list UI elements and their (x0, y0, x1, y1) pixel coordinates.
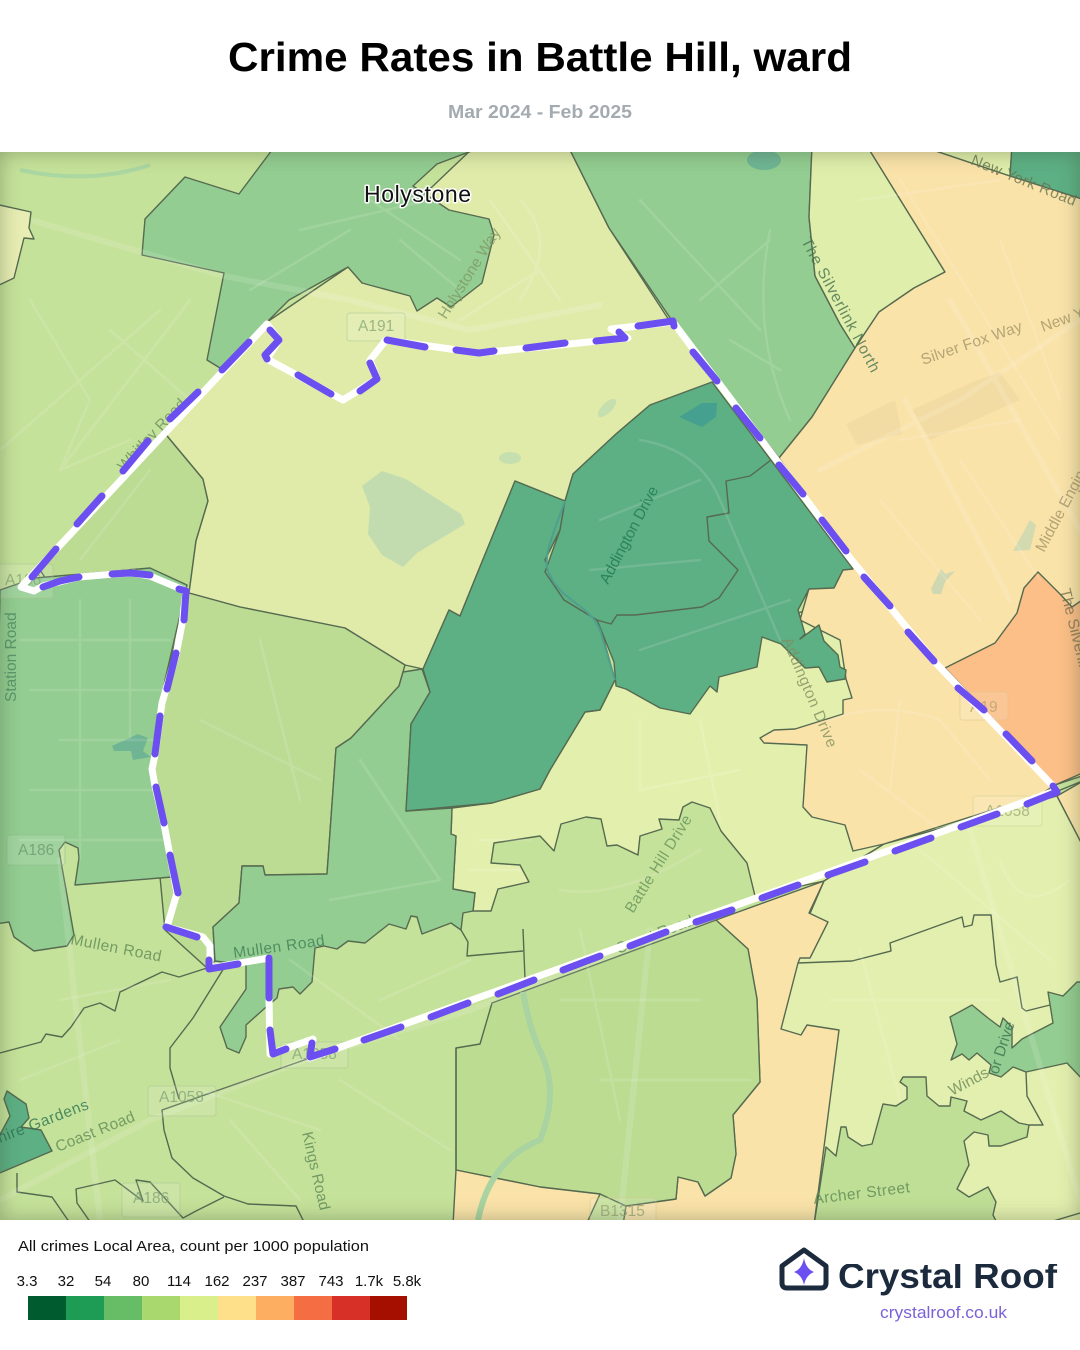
choropleth map (0, 152, 1080, 1220)
street network (0, 180, 1080, 1220)
road label: Whitley Road: Whitley Road (114, 396, 190, 475)
road label: Windsor Drive: Winds (946, 1064, 992, 1100)
road label: Holystone Way: Holystone Way (435, 225, 504, 322)
legend scale labels: 80 (133, 1273, 149, 1290)
map areas: choropleth polygons (0, 146, 1080, 1225)
icon: house with star (780, 1248, 828, 1290)
road label: Coast Road west: Coast Road (53, 1108, 137, 1156)
road badge: A186 centre-west (7, 835, 65, 865)
road labels (0, 152, 1080, 1228)
road label: Battle Hill Drive: Battle Hill Drive (622, 812, 696, 916)
legend scale labels: 114 (167, 1273, 191, 1290)
road badge: A186 south: A186 (133, 1190, 169, 1207)
place label: Holystone: Holystone (364, 181, 471, 207)
road badge: A19 (960, 692, 1008, 720)
water: ponds and river (20, 150, 1036, 1220)
legend scale labels (17, 1273, 422, 1290)
road badge: A186 west (0, 564, 53, 598)
road label: The Silverlink North: The Silverlink North (797, 235, 883, 375)
road label: Station Road: Station Road (3, 612, 20, 702)
legend scale labels: 162 (204, 1273, 230, 1290)
logo: Crystal Roof (780, 1248, 1058, 1322)
legend scale labels: 54 (95, 1273, 111, 1290)
legend colour bar (28, 1296, 407, 1320)
road label: Mullen Road west: Mullen Road (69, 931, 163, 965)
legend title: All crimes Local Area, count per 1000 population (18, 1238, 369, 1255)
ward boundary: dashed route (21, 321, 1057, 1058)
website link: crystalroof.co.uk (880, 1304, 1008, 1322)
legend scale labels: 3.3 (17, 1273, 37, 1290)
legend scale labels: 237 (242, 1273, 268, 1290)
road badge: A186 west: A186 (5, 572, 41, 589)
road badge: A1058 east: A1058 (985, 803, 1030, 820)
legend scale labels: 32 (58, 1273, 74, 1290)
road label: Silver Fox Way: Silver Fox Way (919, 318, 1025, 369)
road label: Archer Street: Archer Street (812, 1179, 911, 1208)
map edge shadow (0, 152, 1080, 1220)
road badge: A1058 south: A1058 (292, 1046, 337, 1063)
road label: Coast Road east: Coast Road (613, 912, 696, 958)
road badge: A1058 south-west: A1058 (159, 1089, 204, 1106)
legend (17, 1238, 422, 1320)
subtitle: date range: Mar 2024 - Feb 2025 (448, 102, 632, 122)
retail park shading (846, 400, 902, 445)
area boundary lines (0, 460, 1080, 1226)
legend scale labels: 743 (318, 1273, 344, 1290)
road label: Windsor Drive upper: or Drive (986, 1019, 1019, 1076)
road badge: B1315 (590, 1198, 656, 1228)
road badge: A191 (347, 313, 405, 341)
road label: Addington Drive north: Addington Drive (597, 484, 662, 587)
road badge: A191: A191 (358, 318, 394, 335)
road badge: A1058 east (973, 796, 1042, 826)
road label: New York Road: New York Road (969, 152, 1079, 210)
road badge: A1058 south-west (148, 1086, 216, 1116)
legend scale labels: 387 (280, 1273, 306, 1290)
road label: Kings Road: Kings Road (298, 1130, 333, 1212)
road badge: A186 south (122, 1183, 180, 1217)
road label: Mullen Road centre: Mullen Road (232, 932, 326, 962)
road badge: B1315: B1315 (600, 1203, 645, 1220)
legend scale labels: 5.8k (393, 1273, 422, 1290)
title: Crime Rates in Battle Hill, ward (228, 34, 852, 80)
road badge: A19: A19 (970, 699, 998, 716)
road label: Addington Drive south: Addington Drive (778, 635, 840, 750)
legend scale labels: 1.7k (355, 1273, 384, 1290)
road badge: A186 centre-west: A186 (18, 842, 54, 859)
road badge: A1058 south (281, 1042, 348, 1068)
